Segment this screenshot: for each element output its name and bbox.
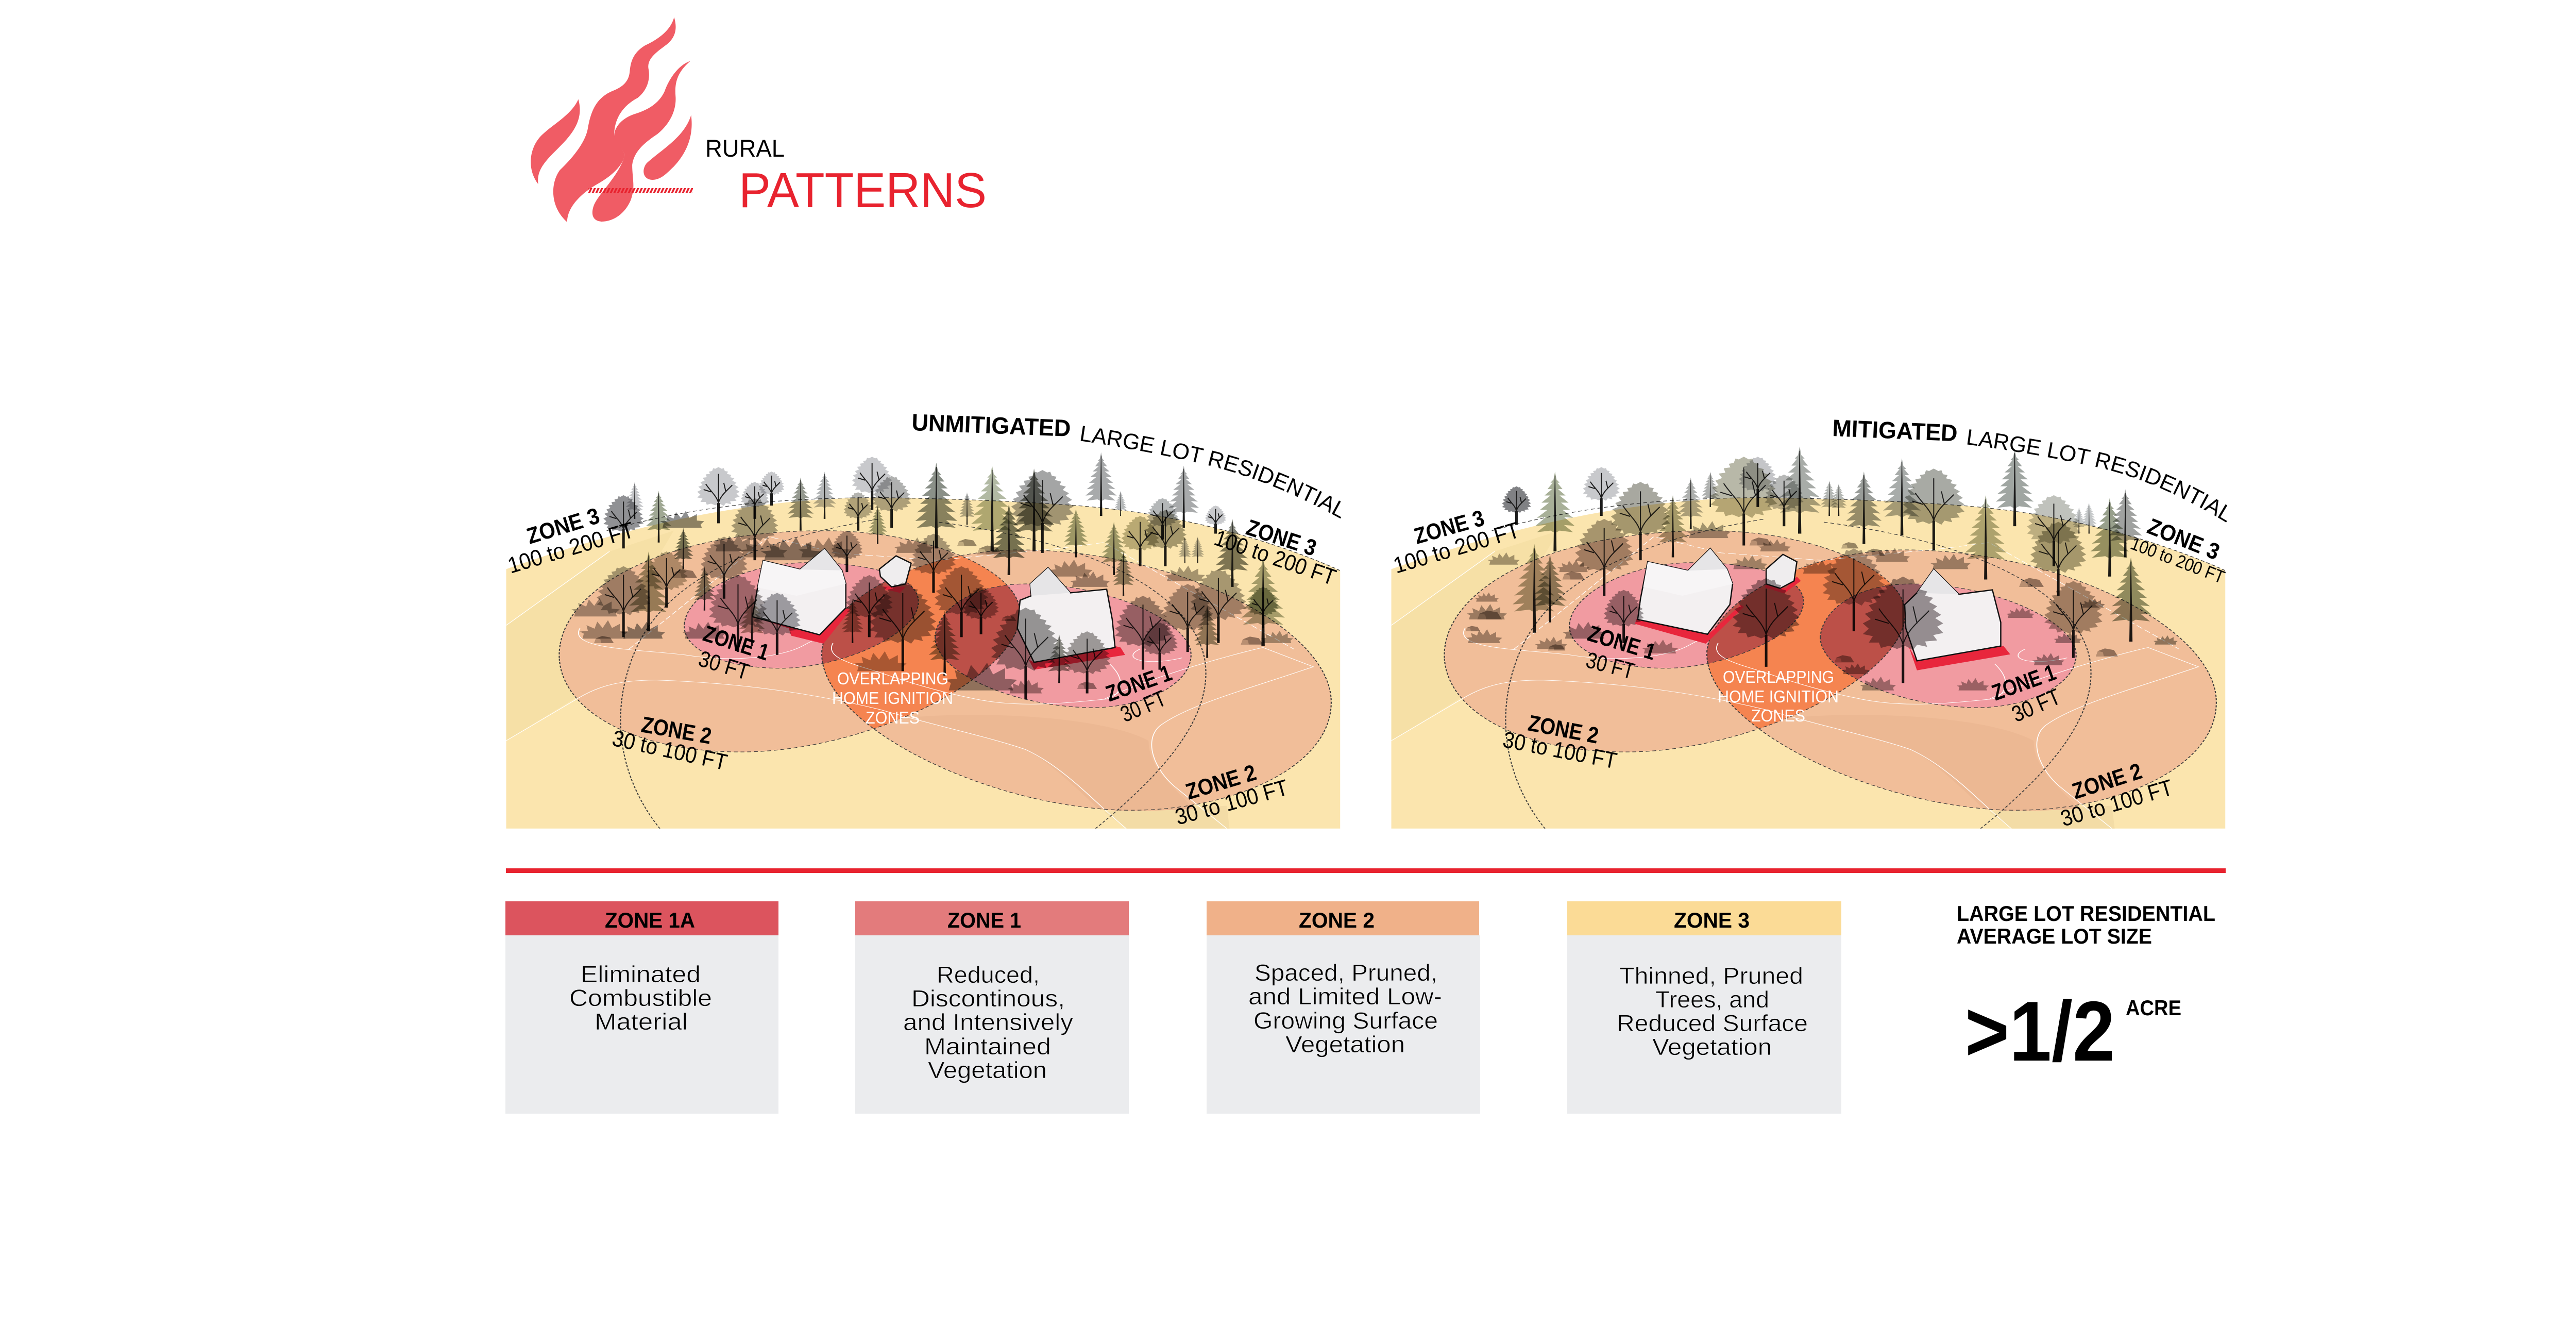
legend card: zone 1A: Eliminated: [581, 961, 701, 987]
label: zone 2 left: ZONE 2: [1526, 711, 1601, 749]
zone base map: mitigated: [1392, 497, 2225, 829]
legend card: zone 3: Trees, and: [1655, 986, 1769, 1013]
average lot size heading: LARGE LOT RESIDENTIAL: [1957, 901, 2215, 926]
unmitigated heading: UNMITIGATED: [911, 409, 1071, 442]
label: zone 1 right: 30 FT: [1117, 686, 1170, 727]
label: zone 1 right: 30 FT: [2008, 684, 2064, 727]
curved subtitle: large lot residential: LARGE LOT RESIDENTIAL: [1967, 429, 2228, 523]
label: zone 3 left: ZONE 3: [1411, 506, 1487, 549]
legend card: zone 1A: Material: [595, 1009, 688, 1035]
label: zone 3 right: 100 to 200 FT: [2128, 533, 2227, 587]
legend card: zone 1A: Combustible: [569, 985, 712, 1011]
label: zone 3 right: ZONE 3: [1243, 515, 1319, 561]
label: overlapping home ignition zones: HOME IGNITION: [1718, 687, 1839, 706]
label: overlapping home ignition zones: OVERLAPPING: [837, 669, 948, 688]
legend card: zone 2: Spaced, Pruned,: [1255, 960, 1437, 986]
legend card: zone 1A: [505, 901, 778, 1114]
label: zone 2 left: ZONE 2: [639, 712, 714, 749]
legend card: zone 1A: ZONE 1A: [605, 908, 695, 932]
curved subtitle: large lot residential: LARGE LOT RESIDENTIAL: [1081, 426, 1342, 518]
average lot size heading: AVERAGE LOT SIZE: [1957, 924, 2152, 948]
title: PATTERNS: PATTERNS: [739, 163, 987, 218]
legend card: zone 2: Vegetation: [1285, 1031, 1405, 1057]
label: overlapping home ignition zones: ZONES: [866, 708, 920, 727]
label: zone 1 left: 30 FT: [696, 646, 752, 685]
label: zone 1 left: 30 FT: [1583, 647, 1637, 684]
label: zone 1 right: ZONE 1: [1103, 660, 1175, 707]
legend card: zone 2: and Limited Low-: [1248, 983, 1442, 1010]
legend card: zone 1: Vegetation: [928, 1057, 1047, 1083]
label: zone 2 left: [1501, 711, 1619, 774]
flame ground hatch line: [588, 188, 693, 193]
trees, shrubs and houses: unmitigated: [571, 452, 1293, 699]
zone base map: unmitigated: [506, 497, 1340, 829]
label: zone 3 right: 100 to 200 FT: [1211, 525, 1339, 591]
legend card: zone 3: ZONE 3: [1674, 908, 1750, 932]
label: zone 3 left: ZONE 3: [524, 503, 603, 549]
mitigated heading: MITIGATED: [1832, 414, 1958, 446]
shed: [1765, 555, 1801, 593]
label: overlapping home ignition zones: HOME IGNITION: [832, 688, 953, 708]
label: overlapping home ignition zones: [1718, 667, 1839, 725]
shed: [879, 556, 911, 593]
legend card: zone 3: Reduced Surface: [1617, 1010, 1808, 1036]
average lot size heading: [1957, 901, 2215, 948]
legend card: zone 2: Growing Surface: [1253, 1007, 1438, 1034]
label: overlapping home ignition zones: ZONES: [1751, 706, 1805, 725]
legend card: zone 1: Reduced,: [937, 962, 1040, 988]
panel: mitigated large lot residential: [1391, 414, 2228, 832]
legend card: zone 1: and Intensively: [903, 1009, 1074, 1035]
legend card: zone 1: Discontinous,: [911, 985, 1065, 1012]
label: zone 1 left: [1583, 621, 1659, 684]
average lot size value: >1/2: [1965, 984, 2115, 1079]
panel: unmitigated large lot residential: [505, 409, 1342, 830]
label: zone 1 left: ZONE 1: [1585, 621, 1659, 665]
label: zone 3 left: 100 to 200 FT: [505, 517, 637, 579]
legend card: zone 3: Thinned, Pruned: [1619, 963, 1803, 989]
legend card: zone 2: [1207, 901, 1480, 1114]
label: zone 1 right: [1989, 660, 2064, 727]
label: zone 1 left: ZONE 1: [700, 621, 772, 665]
flame logo: [531, 17, 692, 222]
label: zone 2 left: 30 to 100 FT: [1501, 727, 1619, 774]
label: zone 2 right: ZONE 2: [2069, 759, 2145, 804]
legend card: zone 1: ZONE 1: [947, 908, 1021, 932]
label: zone 1 right: ZONE 1: [1989, 660, 2059, 706]
legend card: zone 3: [1567, 901, 1841, 1114]
trees, shrubs and houses: mitigated: [1466, 446, 2178, 691]
label: zone 3 right: ZONE 3: [2144, 514, 2223, 565]
legend card: zone 1: Maintained: [924, 1033, 1051, 1060]
label: zone 2 right: 30 to 100 FT: [2058, 775, 2176, 832]
label: zone 3 right: [2128, 514, 2227, 587]
average lot size value: ACRE: [2126, 996, 2181, 1020]
right house: [1018, 568, 1125, 670]
legend card: zone 1: [855, 901, 1129, 1114]
legend card: zone 3: Vegetation: [1652, 1034, 1772, 1060]
label: zone 2 right: 30 to 100 FT: [1173, 775, 1291, 830]
left house: [753, 549, 850, 644]
label: zone 2 left: 30 to 100 FT: [610, 726, 730, 776]
label: zone 1 left: [696, 621, 772, 685]
legend card: zone 2: ZONE 2: [1299, 908, 1375, 932]
label: zone 2 right: ZONE 2: [1183, 760, 1259, 805]
label: zone 1 right: [1103, 660, 1175, 727]
label: overlapping home ignition zones: OVERLAPPING: [1723, 667, 1834, 686]
title: RURAL: RURAL: [705, 135, 785, 162]
left house: [1635, 548, 1744, 644]
right house: [1905, 569, 2010, 670]
label: overlapping home ignition zones: [832, 669, 953, 727]
label: zone 3 left: 100 to 200 FT: [1391, 517, 1522, 579]
